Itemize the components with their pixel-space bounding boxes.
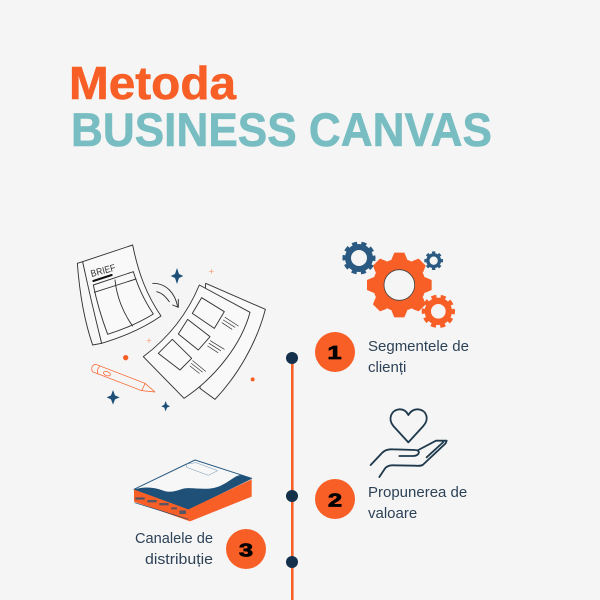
arrow between documents bbox=[153, 283, 178, 307]
step 1 badge: 1 bbox=[328, 343, 342, 363]
storyboard document bbox=[143, 283, 265, 399]
hand bbox=[371, 441, 447, 477]
brief document bbox=[77, 245, 161, 345]
step 2 label: Propunerea de bbox=[368, 484, 467, 501]
orange gear small bbox=[422, 295, 455, 328]
illustration: brief and storyboard documents bbox=[77, 245, 265, 411]
title line: Metoda: Metoda bbox=[69, 57, 236, 109]
icon: hand holding heart bbox=[371, 409, 447, 477]
heart bbox=[391, 409, 427, 442]
icon: gears bbox=[342, 241, 455, 328]
big orange gear bbox=[367, 253, 432, 317]
step 3 label: Canalele de bbox=[135, 530, 213, 547]
device sides bbox=[134, 479, 252, 521]
title line: Business Canvas: BUSINESS CANVAS bbox=[71, 103, 492, 156]
step 3 label: distribuție bbox=[145, 551, 213, 568]
title bbox=[69, 57, 492, 156]
step 2 badge: 2 bbox=[328, 490, 342, 510]
device ports bbox=[135, 497, 186, 514]
device top bbox=[134, 460, 252, 509]
step 1 label: clienți bbox=[368, 359, 406, 376]
icon: device box bbox=[134, 460, 252, 521]
timeline bbox=[286, 352, 298, 600]
step 1 label: Segmentele de bbox=[368, 338, 469, 355]
blue gear small bbox=[424, 251, 443, 270]
orange accents bbox=[123, 269, 255, 381]
step 3 badge bbox=[226, 529, 266, 569]
brief label: BRIEF bbox=[90, 263, 117, 280]
sparkle stars bbox=[107, 268, 183, 411]
blue gear left bbox=[342, 241, 376, 275]
step 1 badge bbox=[315, 332, 355, 372]
icon: pencil bbox=[92, 364, 155, 392]
step 3 badge: 3 bbox=[239, 540, 253, 560]
blue wave bbox=[134, 475, 252, 509]
step 2 label: valoare bbox=[368, 505, 417, 522]
step 2 badge bbox=[315, 479, 355, 519]
